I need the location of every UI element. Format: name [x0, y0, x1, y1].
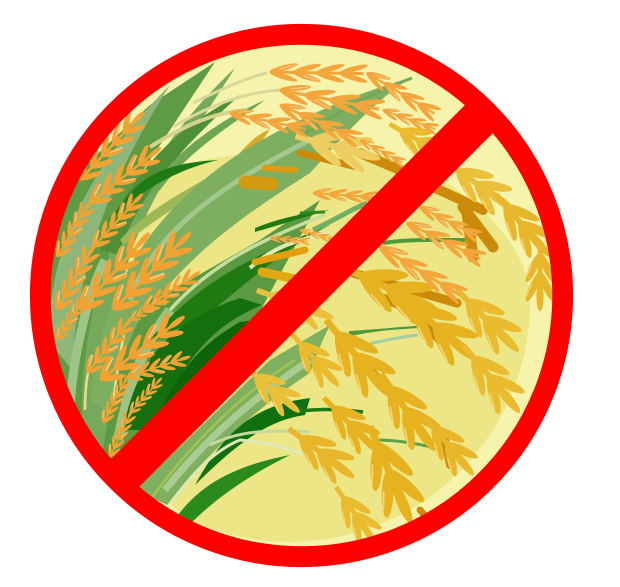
inner darker yellow disc: [60, 153, 530, 542]
red prohibition ring: [40, 34, 563, 557]
orange rice spikes top: [227, 61, 488, 307]
dark gold grains: [245, 153, 493, 525]
green leaves right of bar: [135, 203, 465, 522]
rice illustration: [40, 61, 564, 554]
green leaves left of bar: [40, 62, 412, 480]
golden rice spikes: [251, 122, 552, 540]
red diagonal bar: [101, 95, 503, 497]
pale yellow disc: [50, 44, 554, 548]
orange rice spikes left: [55, 112, 200, 458]
